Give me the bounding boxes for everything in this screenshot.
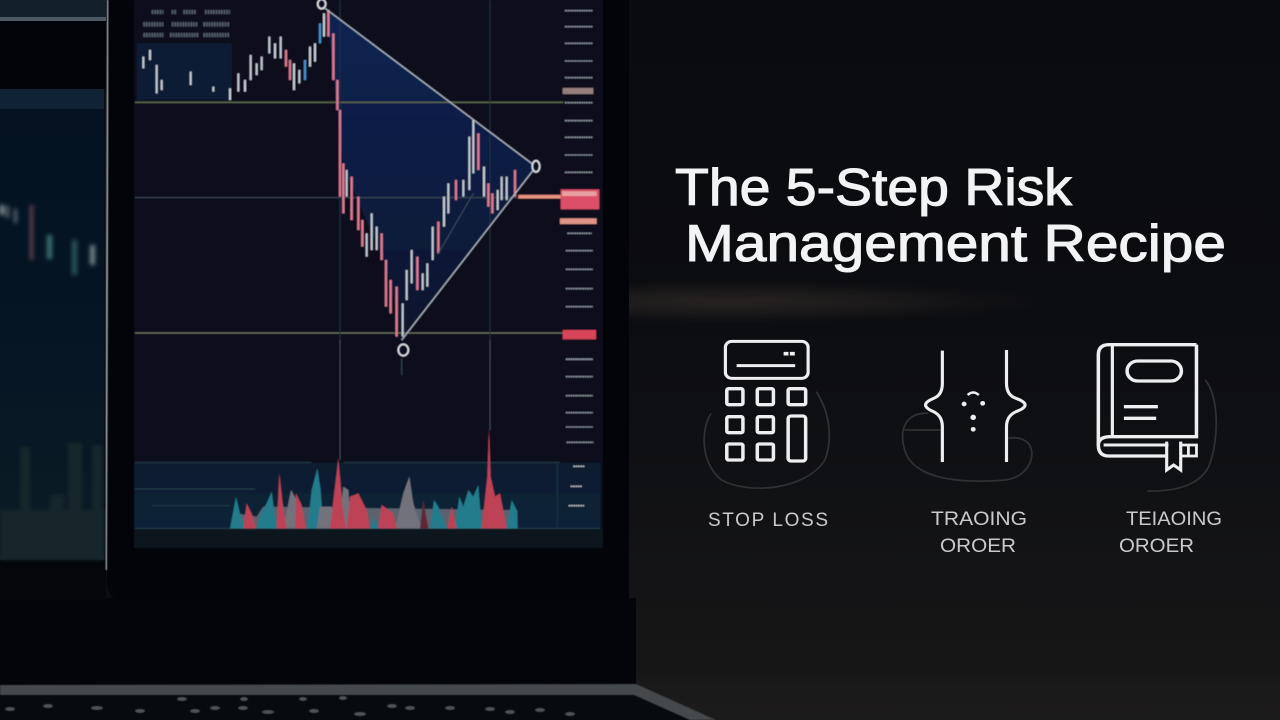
grid lines bbox=[135, 0, 563, 360]
triangle shaded area bbox=[327, 10, 535, 338]
price chart bbox=[135, 0, 599, 360]
price axis lower labels bbox=[566, 359, 593, 506]
pattern trend lines bbox=[325, 8, 536, 340]
label: trading order 1: OROER bbox=[940, 536, 1016, 557]
right background bbox=[620, 0, 1280, 720]
title: Management Recipe bbox=[685, 215, 1226, 273]
volume chart bbox=[134, 340, 601, 528]
label: trading order 2: TEIAOING bbox=[1126, 509, 1222, 530]
candle wicks and bodies: white bbox=[143, 13, 507, 337]
icon: book bbox=[1098, 345, 1216, 491]
volume red bbox=[243, 427, 507, 528]
blue info panel bbox=[137, 43, 232, 100]
icon: braces bbox=[903, 350, 1032, 481]
warm background band bbox=[410, 280, 1050, 324]
price axis tags bbox=[563, 88, 593, 94]
icon: calculator bbox=[704, 341, 829, 488]
chart screen bbox=[134, 0, 603, 548]
volume base fill bbox=[230, 507, 518, 528]
left background screen with blurred chart bbox=[0, 0, 106, 600]
candle wicks and bodies: blue bbox=[305, 23, 320, 80]
label: trading order 1 bbox=[931, 509, 1027, 557]
blurred candles bbox=[0, 205, 95, 275]
candle wicks and bodies: pink bbox=[286, 10, 515, 337]
blurred volume bbox=[0, 443, 104, 560]
title bbox=[675, 159, 1226, 273]
label: trading order 1: TRAOING bbox=[931, 509, 1027, 530]
label: trading order 2 bbox=[1119, 509, 1222, 557]
blurred laptop base bbox=[0, 598, 716, 720]
title: The 5-Step Risk bbox=[675, 159, 1073, 217]
label: trading order 2: OROER bbox=[1119, 536, 1194, 557]
tablet body bbox=[106, 0, 629, 600]
volume gray bbox=[283, 477, 422, 528]
keyboard keys bbox=[5, 696, 575, 716]
pattern node markers bbox=[318, 0, 540, 356]
price axis bbox=[565, 11, 593, 359]
info panel placeholder lines bbox=[143, 12, 230, 35]
volume teal bbox=[230, 468, 518, 528]
label: stop loss: STOP LOSS bbox=[708, 510, 828, 531]
